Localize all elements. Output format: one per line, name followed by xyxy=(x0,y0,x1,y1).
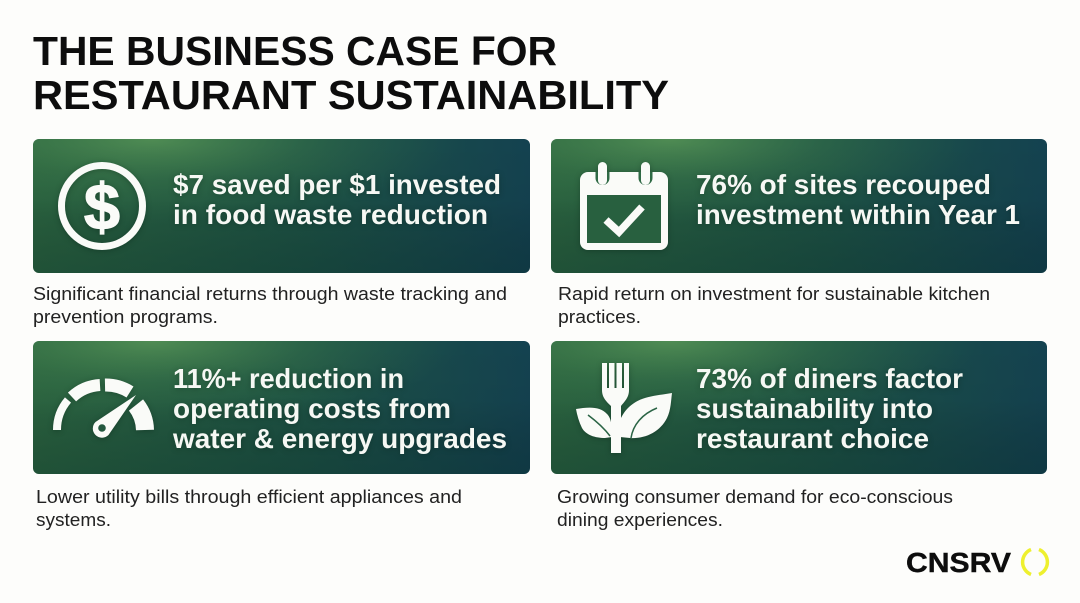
stat heading: water & energy upgrades xyxy=(172,423,507,454)
icon: speedometer gauge xyxy=(57,385,145,438)
stat heading: sustainability into xyxy=(696,393,933,424)
stat heading: $7 saved per $1 invested xyxy=(173,169,501,200)
stat heading: 73% of diners factor xyxy=(696,363,963,394)
text block: diner preference description: Growing consumer demand for eco-conscious xyxy=(557,487,953,507)
text block: food waste description xyxy=(33,284,507,327)
text block: operating costs description xyxy=(36,487,462,530)
text block: food waste description: Significant financial returns through waste tracking and xyxy=(33,284,507,304)
title xyxy=(33,28,669,118)
panel: diner preference xyxy=(551,341,1047,474)
stat heading xyxy=(172,363,507,454)
title: RESTAURANT SUSTAINABILITY xyxy=(33,72,669,118)
stat heading: 76% of sites recouped xyxy=(696,169,991,200)
icon: dollar coin xyxy=(62,166,142,246)
title: THE BUSINESS CASE FOR xyxy=(33,28,557,74)
text block: operating costs description: Lower utility bills through efficient appliances and xyxy=(36,487,462,507)
logo: CNSRV: CNSRV xyxy=(906,547,1012,578)
text block: operating costs description: systems. xyxy=(36,510,111,530)
icon: calendar with check xyxy=(580,162,668,250)
stat heading: 11%+ reduction in xyxy=(173,363,404,394)
logo: CNSRV xyxy=(906,547,1047,578)
panel: operating costs xyxy=(33,341,530,474)
text block: payback description xyxy=(558,284,990,327)
text block: payback description: practices. xyxy=(558,307,641,327)
icon: yellow ring xyxy=(1023,550,1047,574)
text block: diner preference description: dining experiences. xyxy=(557,510,723,530)
stat heading xyxy=(173,169,501,230)
icon: dollar coin: $ xyxy=(84,170,120,243)
stat heading: in food waste reduction xyxy=(173,199,488,230)
icon: fork and leaves xyxy=(576,363,672,453)
text block: payback description: Rapid return on investment for sustainable kitchen xyxy=(558,284,990,304)
text block: food waste description: prevention programs. xyxy=(33,307,218,327)
text block: diner preference description xyxy=(557,487,953,530)
stat heading xyxy=(696,169,1020,230)
stat heading: investment within Year 1 xyxy=(696,199,1020,230)
stat heading: restaurant choice xyxy=(696,423,929,454)
panel: food waste savings xyxy=(33,139,530,273)
stat heading xyxy=(696,363,963,454)
panel: investment payback xyxy=(551,139,1047,273)
stat heading: operating costs from xyxy=(173,393,451,424)
